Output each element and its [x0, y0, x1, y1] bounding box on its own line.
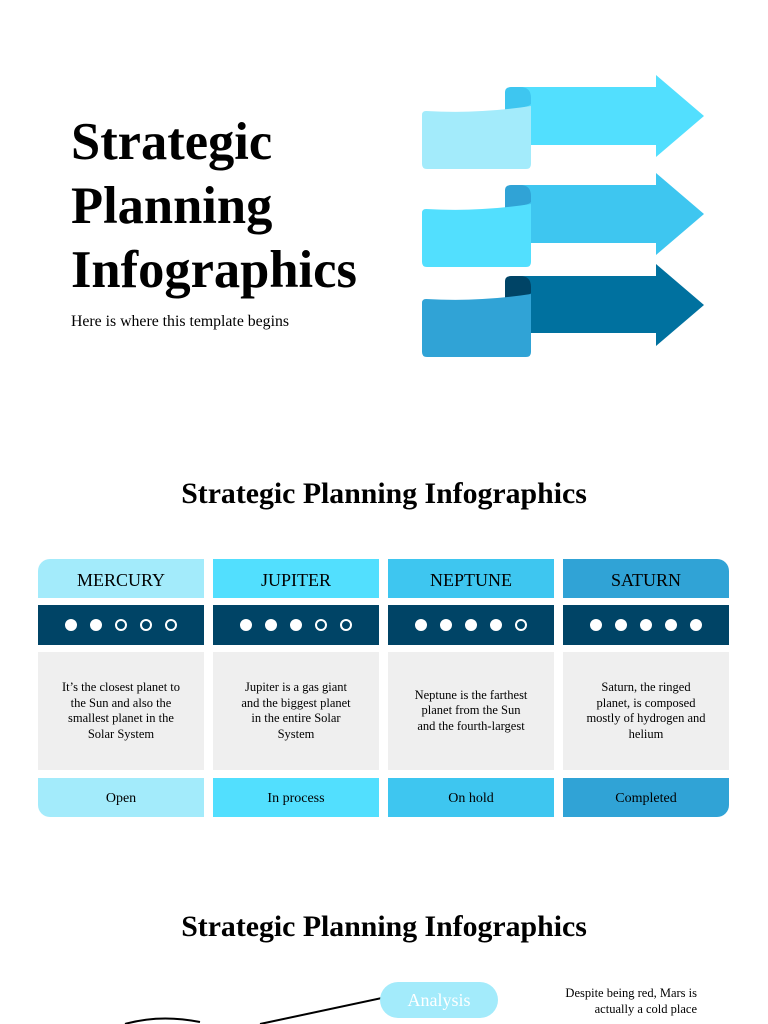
- column: neptune: On hold: [448, 791, 494, 806]
- arrow 2: [422, 173, 704, 267]
- title: Planning: [71, 177, 272, 235]
- subtitle: Here is where this template begins: [71, 313, 289, 330]
- column: mercury: MERCURY: [77, 570, 165, 590]
- pill: analysis: [380, 982, 498, 1018]
- column: jupiter: JUPITER: [261, 570, 331, 590]
- column: saturn: [563, 559, 729, 817]
- title: Infographics: [71, 241, 357, 299]
- text: mars: Despite being red, Mars is actually a cold place: [565, 986, 697, 1016]
- column: mercury: It’s the closest planet to the Sun and also the smallest planet in the Solar System: [62, 680, 180, 740]
- pill: analysis: Analysis: [408, 990, 470, 1010]
- column: saturn: Completed: [615, 791, 677, 806]
- arrow 3: [422, 264, 704, 357]
- column: saturn: Saturn, the ringed planet, is composed mostly of hydrogen and helium: [586, 680, 706, 740]
- column: neptune: [388, 559, 554, 817]
- column: jupiter: Jupiter is a gas giant and the biggest planet in the entire Solar System: [241, 680, 351, 740]
- column: saturn: SATURN: [611, 570, 681, 590]
- title: Strategic: [71, 113, 272, 171]
- table: [38, 559, 729, 817]
- section heading 1: Strategic Planning Infographics: [181, 477, 587, 510]
- section heading 2: Strategic Planning Infographics: [181, 910, 587, 943]
- column: mercury: [38, 559, 204, 817]
- column: mercury: Open: [106, 791, 136, 806]
- arrows illustration: [422, 75, 704, 357]
- column: jupiter: [213, 559, 379, 817]
- column: neptune: planet from the Sun: [422, 703, 520, 717]
- connector lines: [124, 997, 380, 1024]
- column: neptune: NEPTUNE: [430, 570, 512, 590]
- column: neptune: and the fourth-largest: [417, 719, 525, 733]
- title: [71, 113, 357, 299]
- arrow 1: [422, 75, 704, 169]
- column: neptune: Neptune is the farthest: [415, 688, 527, 702]
- column: jupiter: In process: [267, 791, 325, 806]
